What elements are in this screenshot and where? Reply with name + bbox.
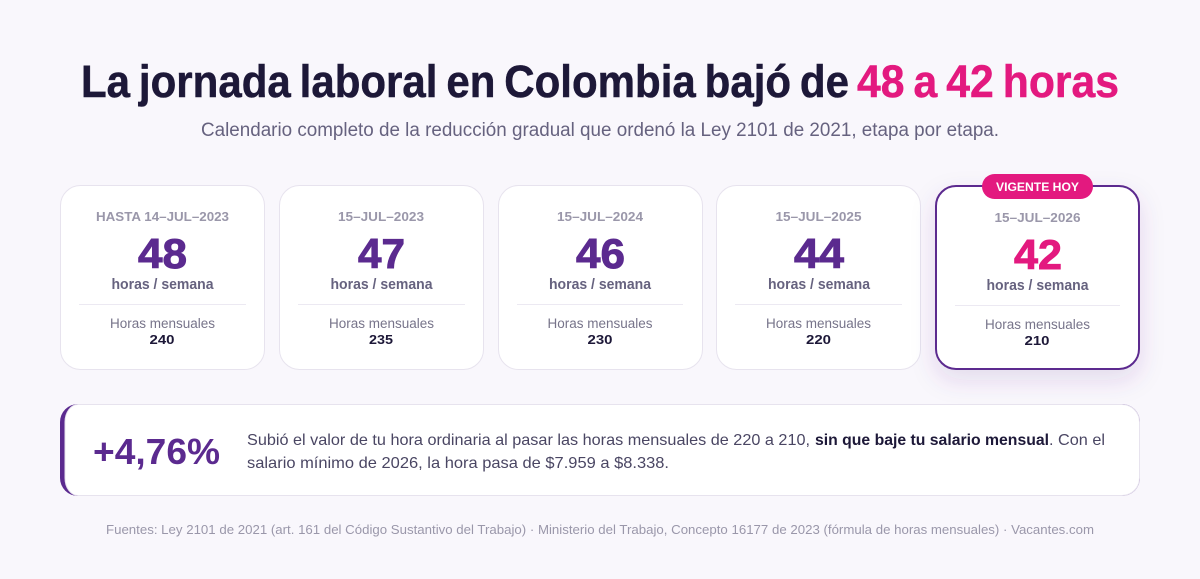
callout text: sin que baje tu salario mensual [815, 432, 1049, 449]
hours per week: 46 [576, 230, 625, 277]
badge: vigente hoy: VIGENTE HOY [996, 180, 1079, 194]
hours per week: 42 [1014, 231, 1062, 278]
hours per week: 44 [794, 230, 845, 277]
unit: horas / semana [768, 277, 871, 293]
monthly value: 235 [369, 332, 393, 347]
hours per week: 47 [358, 230, 405, 277]
card date: 15–JUL–2024 [557, 209, 644, 224]
panel: card 15 jul 2023 [280, 186, 484, 370]
monthly label: Horas mensuales [329, 316, 434, 331]
callout text: salario mínimo de 2026, la hora pasa de $7.959 a $8.338. [247, 455, 669, 472]
panel: card 15 jul 2025 [716, 186, 920, 370]
card date: HASTA 14–JUL–2023 [96, 209, 229, 224]
hours per week: 48 [138, 230, 187, 277]
unit: horas / semana [986, 278, 1089, 294]
monthly label: Horas mensuales [110, 316, 215, 331]
callout text [247, 432, 1105, 472]
panel: active card 15 jul 2026 [936, 174, 1139, 369]
badge: vigente hoy [982, 174, 1093, 199]
callout text: Subió el valor de tu hora ordinaria al pasar las horas mensuales de 220 a 210, [247, 432, 810, 449]
monthly label: Horas mensuales [766, 316, 871, 331]
card date: 15–JUL–2025 [776, 209, 862, 224]
monthly value: 210 [1024, 333, 1050, 348]
card date: 15–JUL–2026 [994, 210, 1080, 225]
monthly value: 240 [150, 332, 174, 347]
card date: 15–JUL–2023 [338, 209, 424, 224]
footer sources: Fuentes: Ley 2101 de 2021 (art. 161 del Código Sustantivo del Trabajo) · Ministerio del Trabajo, Concepto 16177 de 2023 (fórmula de horas mensuales) · Vacantes.com [106, 522, 1094, 537]
unit: horas / semana [549, 277, 652, 293]
panel: callout [60, 404, 1140, 496]
callout figure: +4,76% [93, 431, 220, 472]
monthly label: Horas mensuales [985, 317, 1090, 332]
title: La jornada laboral en Colombia bajó de [81, 56, 849, 107]
monthly value: 230 [588, 332, 612, 347]
panel: card 15 jul 2024 [498, 186, 702, 370]
callout text: . Con el [1049, 432, 1105, 449]
unit: horas / semana [112, 277, 214, 293]
subtitle: Calendario completo de la reducción gradual que ordenó la Ley 2101 de 2021, etapa por etapa. [201, 120, 999, 141]
monthly value: 220 [806, 332, 831, 347]
title: 48 a 42 horas [857, 56, 1119, 107]
unit: horas / semana [330, 277, 433, 293]
monthly label: Horas mensuales [548, 316, 653, 331]
panel: card hasta 14 jul 2023 [60, 186, 264, 370]
